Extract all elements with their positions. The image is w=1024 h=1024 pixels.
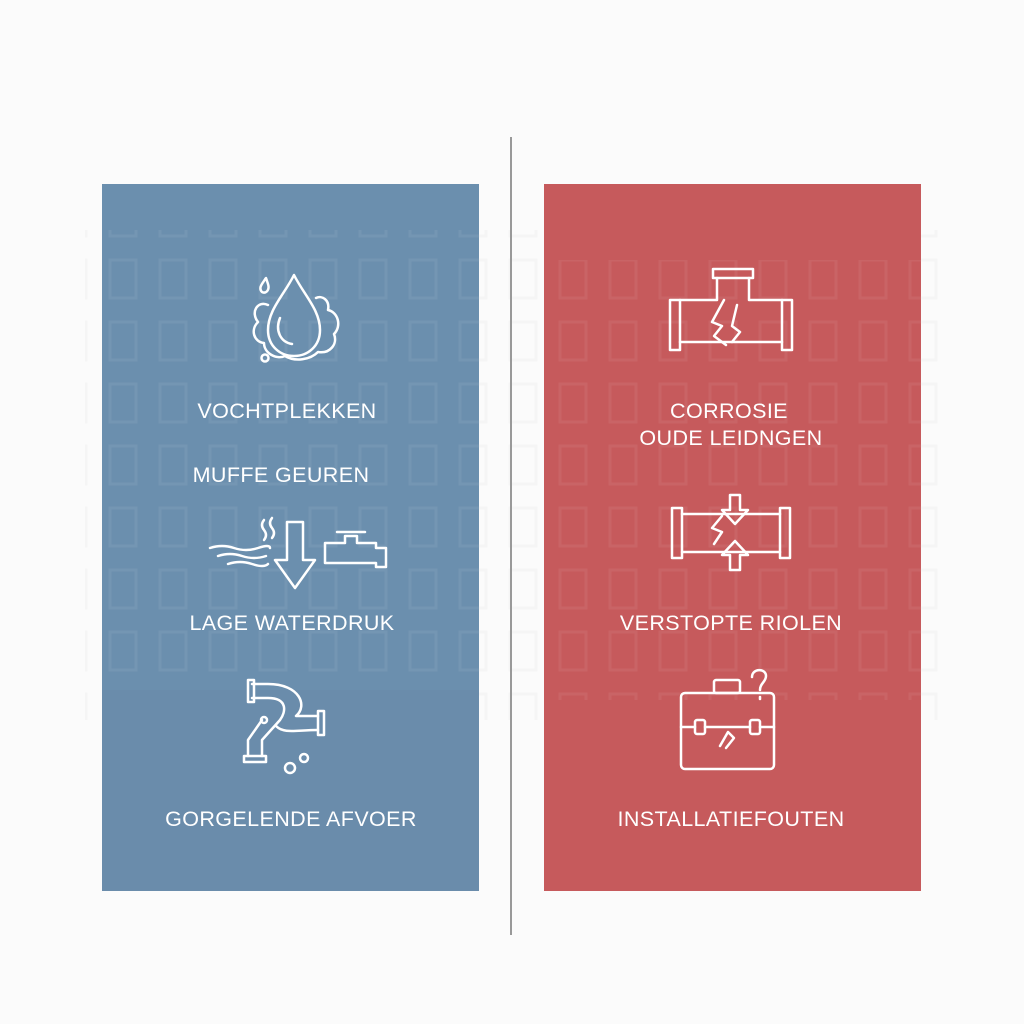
divider [510, 137, 512, 935]
heading: installatiefouten: INSTALLATIEFOUTEN [617, 807, 845, 831]
icon: cracked pipe tee [670, 269, 792, 350]
icon: water stain drop [254, 275, 338, 362]
heading: lage waterdruk: LAGE WATERDRUK [189, 611, 395, 635]
heading: corrosie oude leidngen: CORROSIE [670, 399, 788, 423]
panel: red causes [544, 184, 921, 891]
heading: gorgelende afvoer: GORGELENDE AFVOER [165, 807, 417, 831]
panel: red causes: OUDE LEIDNGEN [639, 426, 823, 450]
heading: muffe geuren: MUFFE GEUREN [193, 463, 369, 487]
heading: verstopte riolen: VERSTOPTE RIOLEN [620, 611, 842, 635]
icon: blocked pipe [672, 495, 790, 570]
icon: pipe elbow [244, 680, 324, 773]
icon: toolbox question [681, 670, 774, 769]
panel: blue symptoms [102, 184, 479, 891]
icon: waves arrow tap [210, 518, 386, 588]
heading: vochtplekken: VOCHTPLEKKEN [197, 399, 377, 423]
